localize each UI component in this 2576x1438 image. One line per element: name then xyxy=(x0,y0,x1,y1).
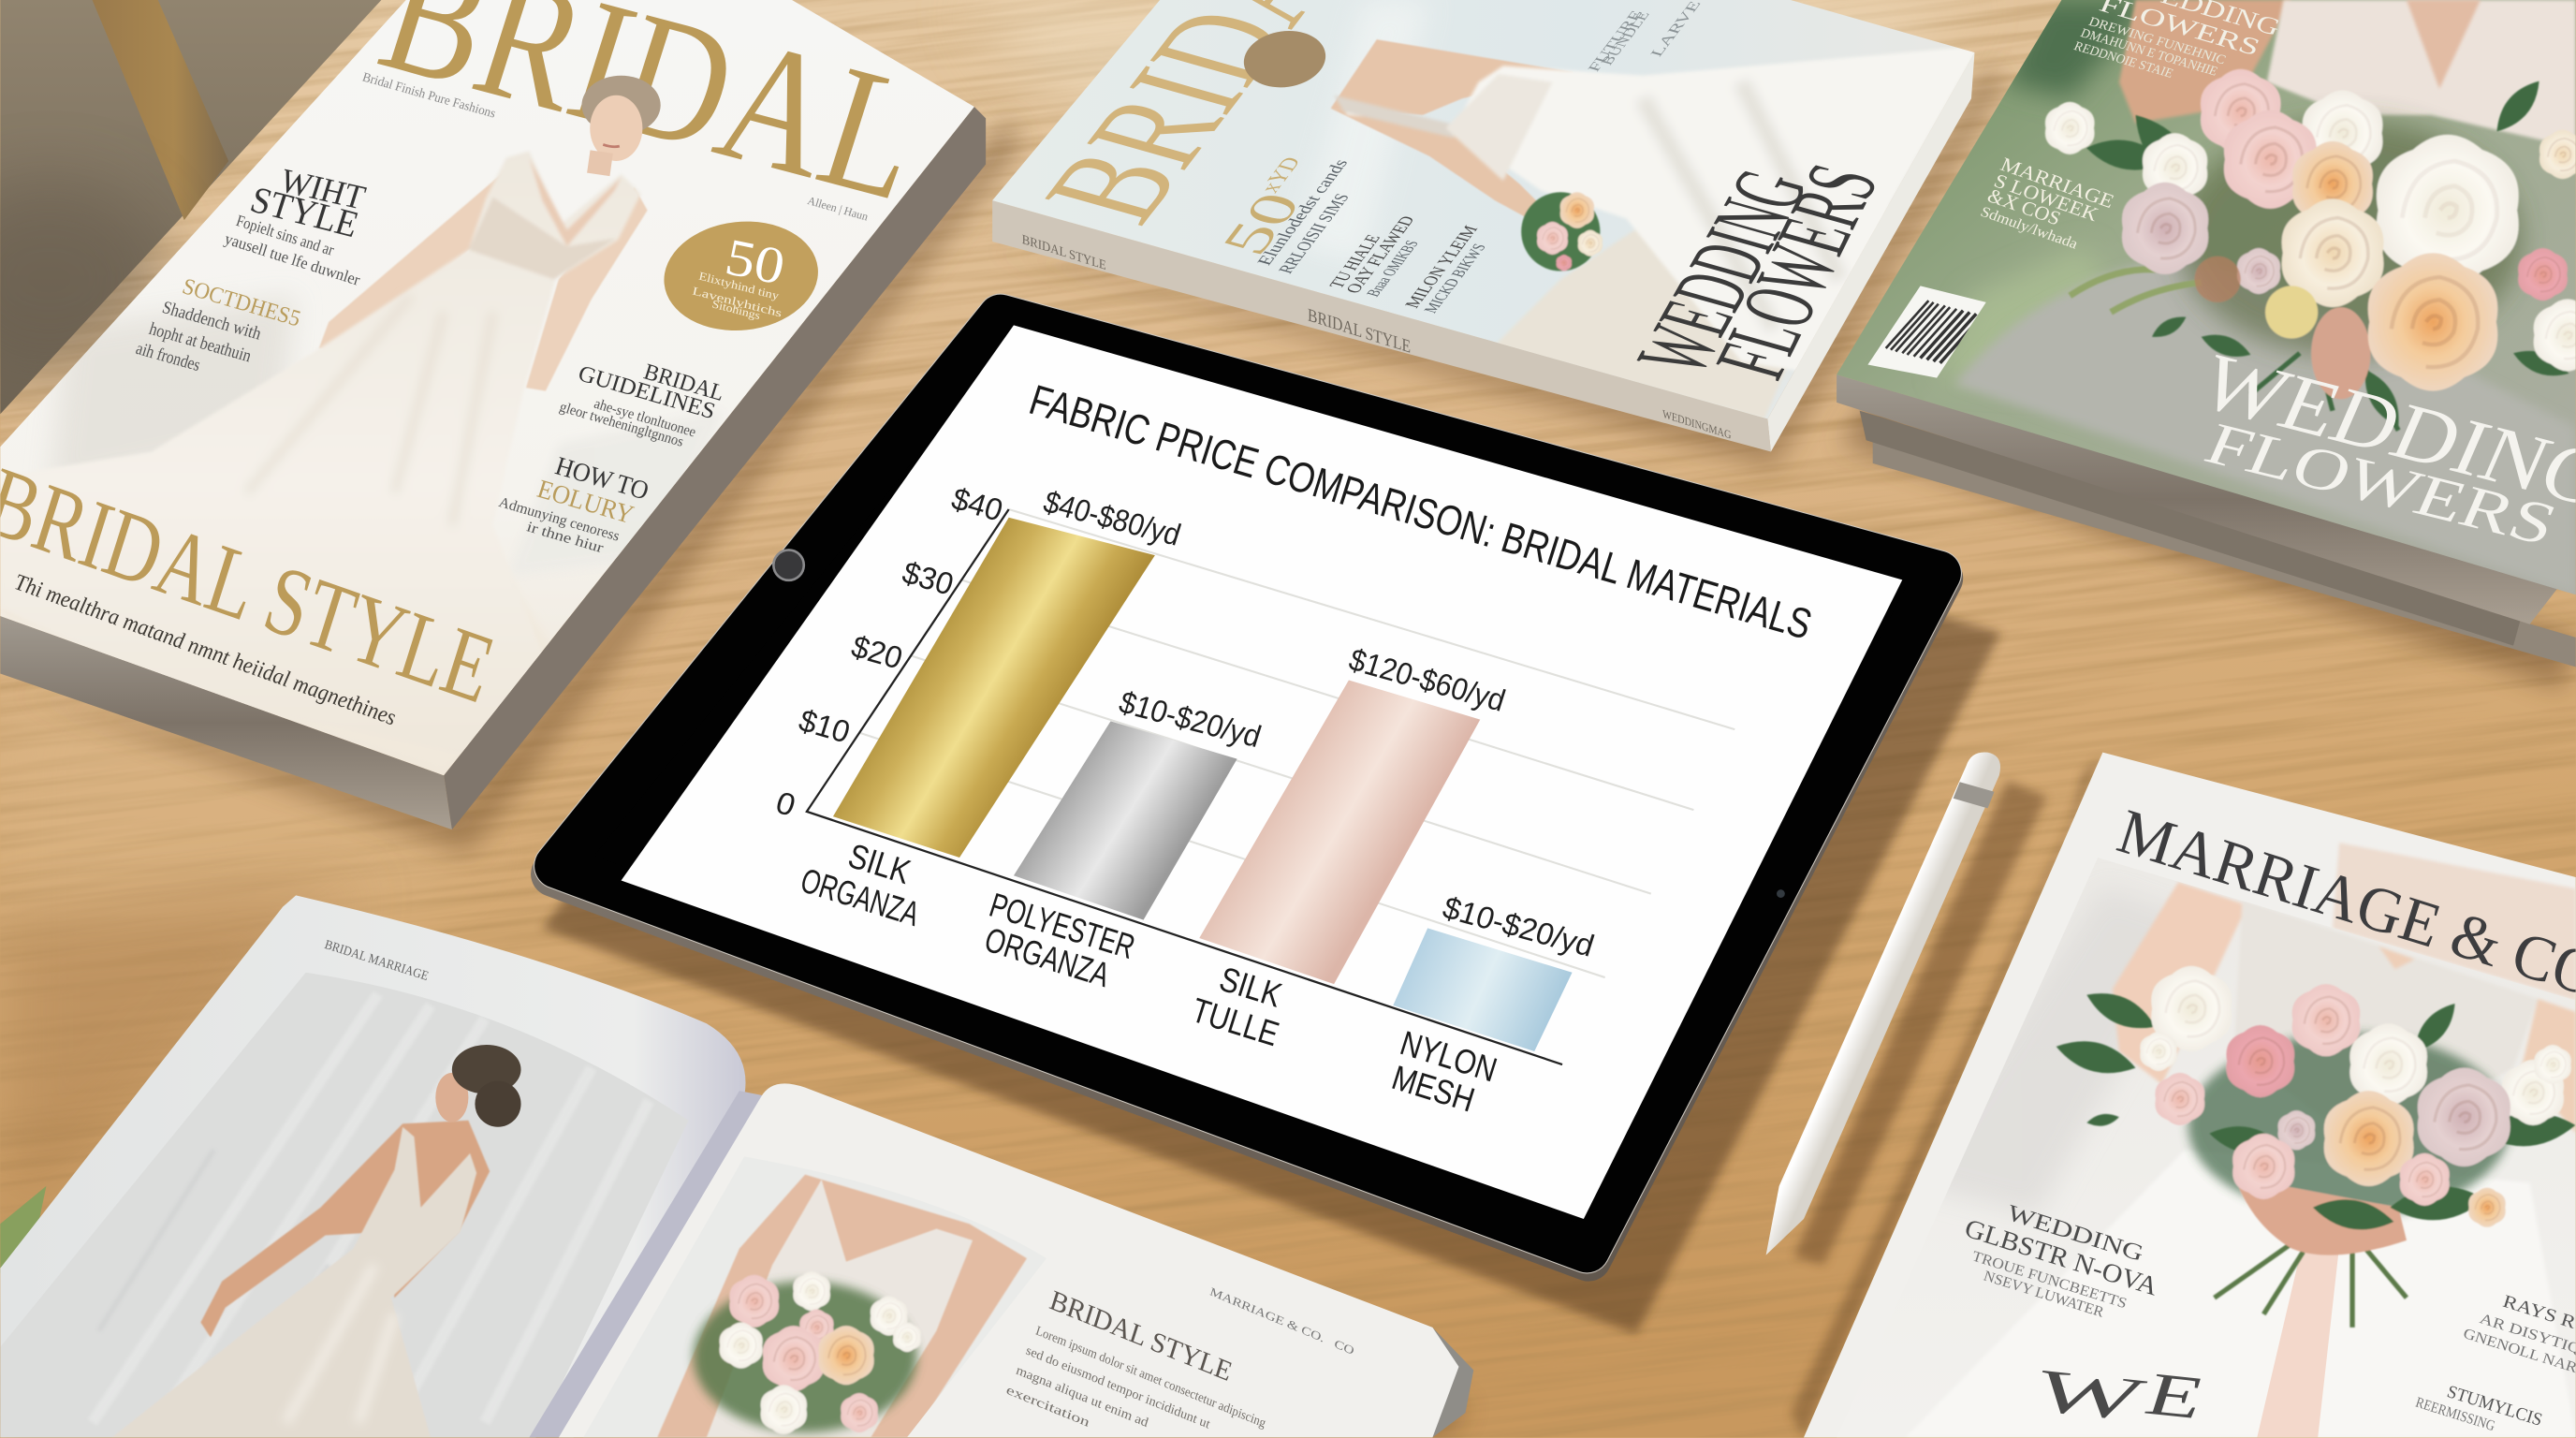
y-axis labels: $40 xyxy=(947,482,1006,529)
bride torso xyxy=(657,1175,1027,1437)
bar: polyester organza xyxy=(1014,685,1265,920)
axes xyxy=(807,509,1562,1064)
cover headlines: RRLOISII SIMS xyxy=(1275,192,1354,275)
cover headlines: gleor tweheningltgnnos xyxy=(558,399,685,450)
small bouquet xyxy=(1521,192,1603,271)
cover headlines: 50 xyxy=(1208,186,1315,261)
cover photo xyxy=(1837,858,2576,1437)
cover headlines: FUTURE xyxy=(1585,9,1647,73)
y-axis labels: $20 xyxy=(847,629,906,676)
magazine: Marriage & Co xyxy=(1791,753,2576,1437)
left page xyxy=(0,895,755,1437)
y-axis labels: 0 xyxy=(771,785,799,824)
tablet metal side xyxy=(554,322,1940,1258)
cover headlines: RAYS R' xyxy=(2500,1292,2576,1334)
cover headlines: aih frondes xyxy=(134,339,202,375)
cover headlines: MILON YLEIM xyxy=(1401,224,1483,310)
bride dress xyxy=(112,1127,476,1437)
cover headlines: AR DISYTIQ xyxy=(2478,1311,2576,1357)
cover headlines xyxy=(1208,0,1899,389)
cover headlines: Fopielt sins and ar xyxy=(234,211,337,259)
bar: nylon mesh xyxy=(1393,891,1598,1051)
magazine cover xyxy=(1804,753,2576,1437)
magazine stack: Wedding Flowers, green cover xyxy=(1837,0,2576,690)
gold seal: Lavenlyhtichs xyxy=(691,284,783,320)
bride arm and back xyxy=(1331,39,1573,220)
cover headlines: REDDNOIE STAIE xyxy=(2071,39,2175,81)
gutter xyxy=(529,1091,772,1437)
category labels: TULLE xyxy=(1187,990,1283,1053)
bar: silk organza: $40-$80/yd xyxy=(1039,485,1185,553)
bouquet xyxy=(2045,69,2576,433)
bride arms and bodice xyxy=(2113,882,2576,1150)
bar: nylon mesh: $10-$20/yd xyxy=(1439,891,1598,964)
magazine cover xyxy=(992,0,1974,418)
category labels: NYLON xyxy=(1396,1023,1501,1089)
magazine: Bridal Style xyxy=(0,0,1018,854)
cover headlines xyxy=(1961,1200,2576,1434)
tablet shadow xyxy=(542,353,2001,1334)
skin tones showing through masthead band xyxy=(2333,843,2576,1001)
cover headlines: BRIDAL xyxy=(641,360,727,406)
magazine spine xyxy=(992,52,1974,452)
category labels: SILK xyxy=(1215,960,1287,1015)
home button xyxy=(772,549,805,581)
cover headlines: BUNDLE xyxy=(1598,10,1653,66)
bride lace bodice xyxy=(707,1180,973,1437)
left page photo xyxy=(0,920,755,1437)
cover headlines: Bnaa OMIKBS xyxy=(1362,239,1422,299)
category labels: ORGANZA xyxy=(797,861,924,933)
background room and chair post xyxy=(0,0,381,414)
bride dress xyxy=(1334,46,1980,378)
category labels: SILK xyxy=(844,836,915,891)
open magazine xyxy=(0,895,1473,1437)
bar: silk tulle: $120-$60/yd xyxy=(1345,643,1509,719)
cover headlines: STYLE xyxy=(246,178,363,245)
cover headlines: TU HIALE xyxy=(1326,233,1384,290)
cover headlines: OAY FLAWED xyxy=(1342,214,1419,295)
pencil shadow xyxy=(1793,780,2047,1265)
gold seal: Sitohings xyxy=(710,297,762,322)
bride hair and face xyxy=(435,1045,521,1127)
cover headlines: FLOWERS xyxy=(2196,411,2567,558)
cover artwork and text xyxy=(1008,0,1980,418)
cover headlines: Shaddench with xyxy=(160,298,264,345)
magazine cover xyxy=(1837,0,2576,594)
gold seal: 50 xyxy=(721,227,790,297)
y-axis labels xyxy=(771,482,1006,824)
cover headlines: GLBSTR N-OVA xyxy=(1961,1214,2162,1302)
bride dress xyxy=(1906,1150,2576,1437)
category labels: POLYESTER xyxy=(985,886,1139,966)
bride head xyxy=(581,76,661,176)
pencil metal band xyxy=(1954,782,1995,808)
stylus pencil xyxy=(1766,752,2000,1255)
magazine: Wedding Flowers, blue-white cover xyxy=(986,0,2004,468)
cover headlines xyxy=(1978,0,2576,558)
tablet screen xyxy=(622,325,1902,1219)
magazine spine: WEDDINGMAG xyxy=(1662,407,1732,442)
cover headlines: W xyxy=(2027,1357,2152,1434)
cover headlines: REERMISSING xyxy=(2414,1395,2496,1434)
category labels: MESH xyxy=(1387,1058,1479,1120)
right page xyxy=(559,1083,1473,1437)
cover headlines: NSEVY LUWATER xyxy=(1982,1269,2106,1321)
article body text: Lorem ipsum dolor sit amet consectetur adipiscing xyxy=(1034,1323,1267,1431)
barcode xyxy=(1867,286,1986,378)
page header: MARRIAGE & CO. CO xyxy=(1208,1284,1356,1357)
cover headlines: MICKD BIKWS xyxy=(1420,242,1489,315)
tablet xyxy=(554,317,1940,1258)
cover headlines: Sdmuly/lwhada xyxy=(1978,204,2080,252)
cover headlines: WIHT xyxy=(275,161,370,216)
cover headlines xyxy=(134,70,870,556)
left page header: BRIDAL MARRIAGE xyxy=(323,938,430,984)
tablet black bezel xyxy=(557,317,1939,1250)
cover headlines: Alleen | Haun xyxy=(806,194,870,223)
cover headlines: ahe-sye tlonltuonee xyxy=(593,396,697,440)
bride dress xyxy=(0,151,641,756)
category labels: ORGANZA xyxy=(980,920,1115,994)
cover tagline: Thi mealthra matand nmnt heiidal magnethines xyxy=(12,569,398,731)
article body text: exercitation xyxy=(1004,1383,1091,1431)
cover headlines: &X COS xyxy=(1984,184,2064,229)
cover headlines: GUIDELINES xyxy=(575,360,718,424)
camera xyxy=(1777,889,1785,898)
cover headlines: Bridal Finish Pure Fashions xyxy=(360,70,497,122)
cover headlines: HOW TO xyxy=(552,452,652,506)
cover headlines: E xyxy=(2138,1360,2213,1431)
y-axis labels: $10 xyxy=(795,703,854,750)
cover headlines: ir thne hiur xyxy=(525,519,606,556)
bar: silk organza xyxy=(833,485,1185,858)
magazine page edges xyxy=(0,107,986,829)
green page peeking out xyxy=(0,1186,46,1273)
cover headlines: yausell tue lfe duwnler xyxy=(223,228,362,289)
gold seal xyxy=(664,221,818,330)
cover artwork and text xyxy=(0,0,944,772)
magazine cover xyxy=(0,0,974,775)
pencil body xyxy=(1766,752,2000,1255)
bouquet xyxy=(694,1271,921,1434)
magazine spine: BRIDAL STYLE xyxy=(1022,233,1106,273)
magazine spine: BRIDAL STYLE xyxy=(1308,305,1411,358)
category labels xyxy=(797,836,1501,1120)
gold seal: Elixtyhind tiny xyxy=(697,270,781,302)
cover artwork and text xyxy=(1867,0,2576,594)
lower magazines in stack xyxy=(1860,411,2576,667)
cover headlines: GNENOLL NAR xyxy=(2461,1326,2576,1376)
bar: silk tulle xyxy=(1199,643,1509,984)
top magazine page edges xyxy=(1837,374,2557,624)
cover headlines: SOCTDHES5 xyxy=(180,273,303,331)
cover headlines: DMAHUNN E TOPANHIE xyxy=(2078,26,2219,80)
article body text: sed do eiusmod tempor incididunt ut xyxy=(1024,1343,1212,1432)
cover headlines: Elunlodedst cands xyxy=(1254,157,1353,268)
cover headlines: DREWING FUNEHNIC xyxy=(2086,14,2228,67)
cover headlines: hopht at beathuin xyxy=(147,319,254,366)
bouquet xyxy=(2053,966,2576,1328)
y-axis labels: $30 xyxy=(898,556,958,602)
cover headlines: xYD xyxy=(1256,154,1306,196)
cover headlines: S LOWEEK xyxy=(1991,169,2101,226)
bride hair xyxy=(1240,26,1329,93)
right page photo xyxy=(559,1150,1068,1437)
article heading: BRIDAL STYLE xyxy=(1046,1284,1236,1387)
bride arms xyxy=(319,164,648,391)
bride skin: arm and back xyxy=(200,1121,490,1337)
cover headlines: Admunying cenoress xyxy=(497,494,622,545)
bar: polyester organza: $10-$20/yd xyxy=(1115,685,1265,755)
cover headlines: EOLURY xyxy=(534,475,637,530)
cover headlines: MARRIAGE xyxy=(1998,153,2117,213)
ribbon xyxy=(2257,1221,2341,1437)
tablet silver rim xyxy=(557,317,1939,1250)
cover headlines: LARVE xyxy=(1647,0,1705,58)
article body text: magna aliqua ut enim ad xyxy=(1015,1363,1150,1431)
cover headlines: TROUE FUNCBEETTS xyxy=(1970,1249,2129,1312)
chart title: FABRIC PRICE COMPARISON: BRIDAL MATERIALS xyxy=(1024,375,1817,649)
cover headlines: WEDDING xyxy=(2004,1200,2146,1267)
chart: fabric price comparison xyxy=(771,375,1817,1120)
cover headlines: STUMYLCIS xyxy=(2445,1382,2544,1431)
